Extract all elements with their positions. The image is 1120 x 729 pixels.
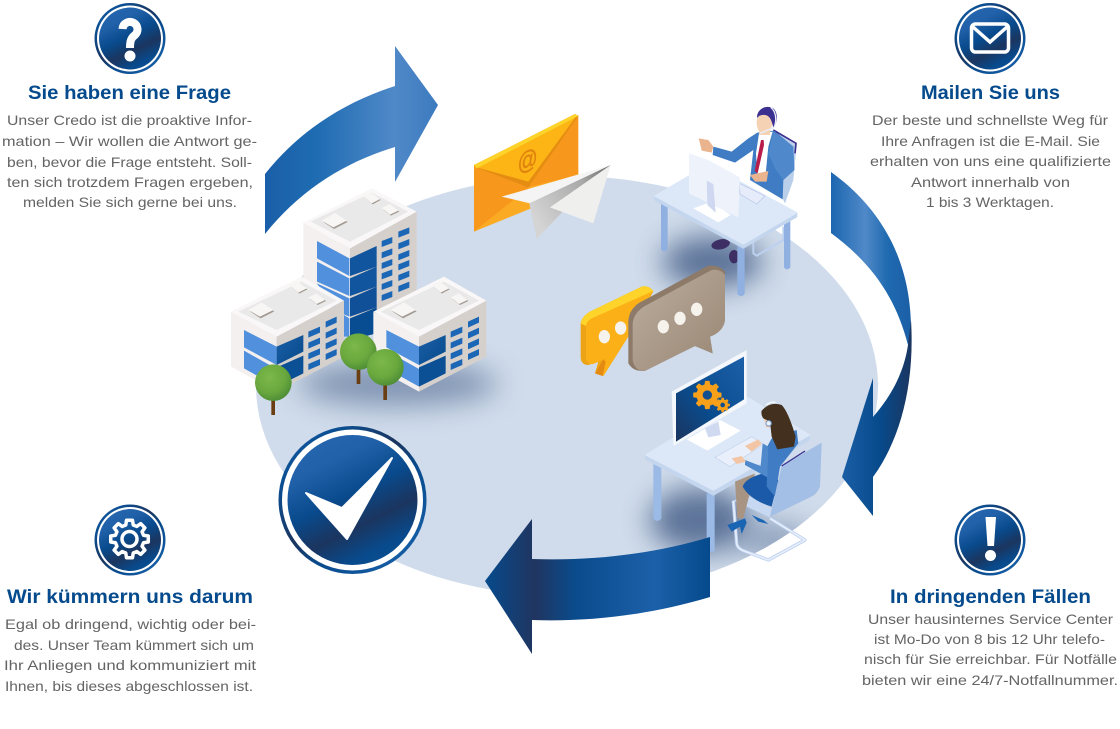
text block [862, 611, 1118, 688]
left building [231, 277, 344, 392]
chair back [770, 443, 822, 517]
text block [870, 112, 1111, 210]
arrow: bottom [485, 519, 710, 654]
chair seat and frame [733, 495, 805, 560]
office chair [753, 130, 797, 256]
text block: mation – Wir wollen die Antwort ge- [2, 133, 257, 149]
panel: mail [870, 3, 1111, 210]
text block: 1 bis 3 Werktagen. [926, 194, 1054, 210]
tree: left [255, 364, 292, 415]
text block: ist Mo-Do von 8 bis 12 Uhr telefo- [874, 631, 1105, 647]
icon: large check badge [278, 426, 426, 574]
tree: centre [340, 333, 377, 384]
icon: envelope [954, 3, 1026, 74]
keyboard [715, 437, 763, 467]
heading: In dringenden Fällen [890, 587, 1091, 608]
woman at desk [646, 350, 822, 560]
icon: question mark [94, 3, 166, 74]
shoes [710, 238, 739, 263]
arrow: right side [831, 172, 912, 516]
background ellipse [256, 176, 878, 596]
envelope and paper plane [474, 114, 611, 239]
text block: Unser Credo ist die proaktive Infor- [7, 112, 252, 128]
icon: small gear [715, 398, 730, 412]
text block: ben, bevor die Frage entsteht. Soll- [7, 154, 252, 170]
text block: Der beste und schnellste Weg für [872, 112, 1108, 128]
heading: Wir kümmern uns darum [7, 587, 253, 608]
text block: nisch für Sie erreichbar. Für Notfälle [864, 651, 1117, 667]
icon: exclamation mark [954, 504, 1026, 576]
panel: question [2, 3, 257, 210]
text block [2, 112, 257, 210]
soft ground shadows [298, 236, 813, 556]
man at desk [655, 107, 797, 296]
icon: large gear [693, 381, 721, 409]
man figure [699, 107, 794, 199]
text block: des. Unser Team kümmert sich um [14, 637, 254, 653]
text block [4, 616, 256, 694]
tower building [303, 188, 417, 340]
right building [373, 277, 486, 392]
text block: ten sich trotzdem Fragen ergeben, [7, 174, 253, 190]
computer monitor and keyboard [689, 153, 768, 222]
yellow bubble [581, 286, 653, 376]
woman figure [727, 402, 798, 534]
panel: we take care [4, 504, 256, 694]
computer monitor with gears [672, 350, 747, 451]
text block: Unser hausinternes Service Center [868, 611, 1113, 627]
text block: Ihre Anfragen ist die E-Mail. Sie [881, 133, 1100, 149]
text block: Ihr Anliegen und kommuniziert mit [4, 657, 256, 673]
text block: Antwort innerhalb von [911, 174, 1070, 190]
heading: Mailen Sie uns [921, 83, 1060, 104]
buildings [231, 188, 486, 415]
icon: cog [94, 504, 166, 576]
chat bubbles [581, 266, 725, 376]
text block: Egal ob dringend, wichtig oder bei- [5, 616, 256, 632]
heading: Sie haben eine Frage [28, 83, 231, 104]
text block: bieten wir eine 24/7-Notfallnummer. [862, 672, 1118, 688]
arrow: top left [265, 46, 438, 234]
tree: right [367, 349, 404, 400]
panel: urgent cases [862, 504, 1118, 688]
brown bubble [628, 266, 725, 371]
paper plane [502, 165, 611, 239]
envelope: @ [518, 142, 538, 177]
text block: Ihnen, bis dieses abgeschlossen ist. [5, 678, 253, 694]
text block: erhalten von uns eine qualifizierte [870, 153, 1111, 169]
text block: melden Sie sich gerne bei uns. [23, 194, 237, 210]
desk [646, 395, 809, 552]
desk [655, 165, 797, 296]
